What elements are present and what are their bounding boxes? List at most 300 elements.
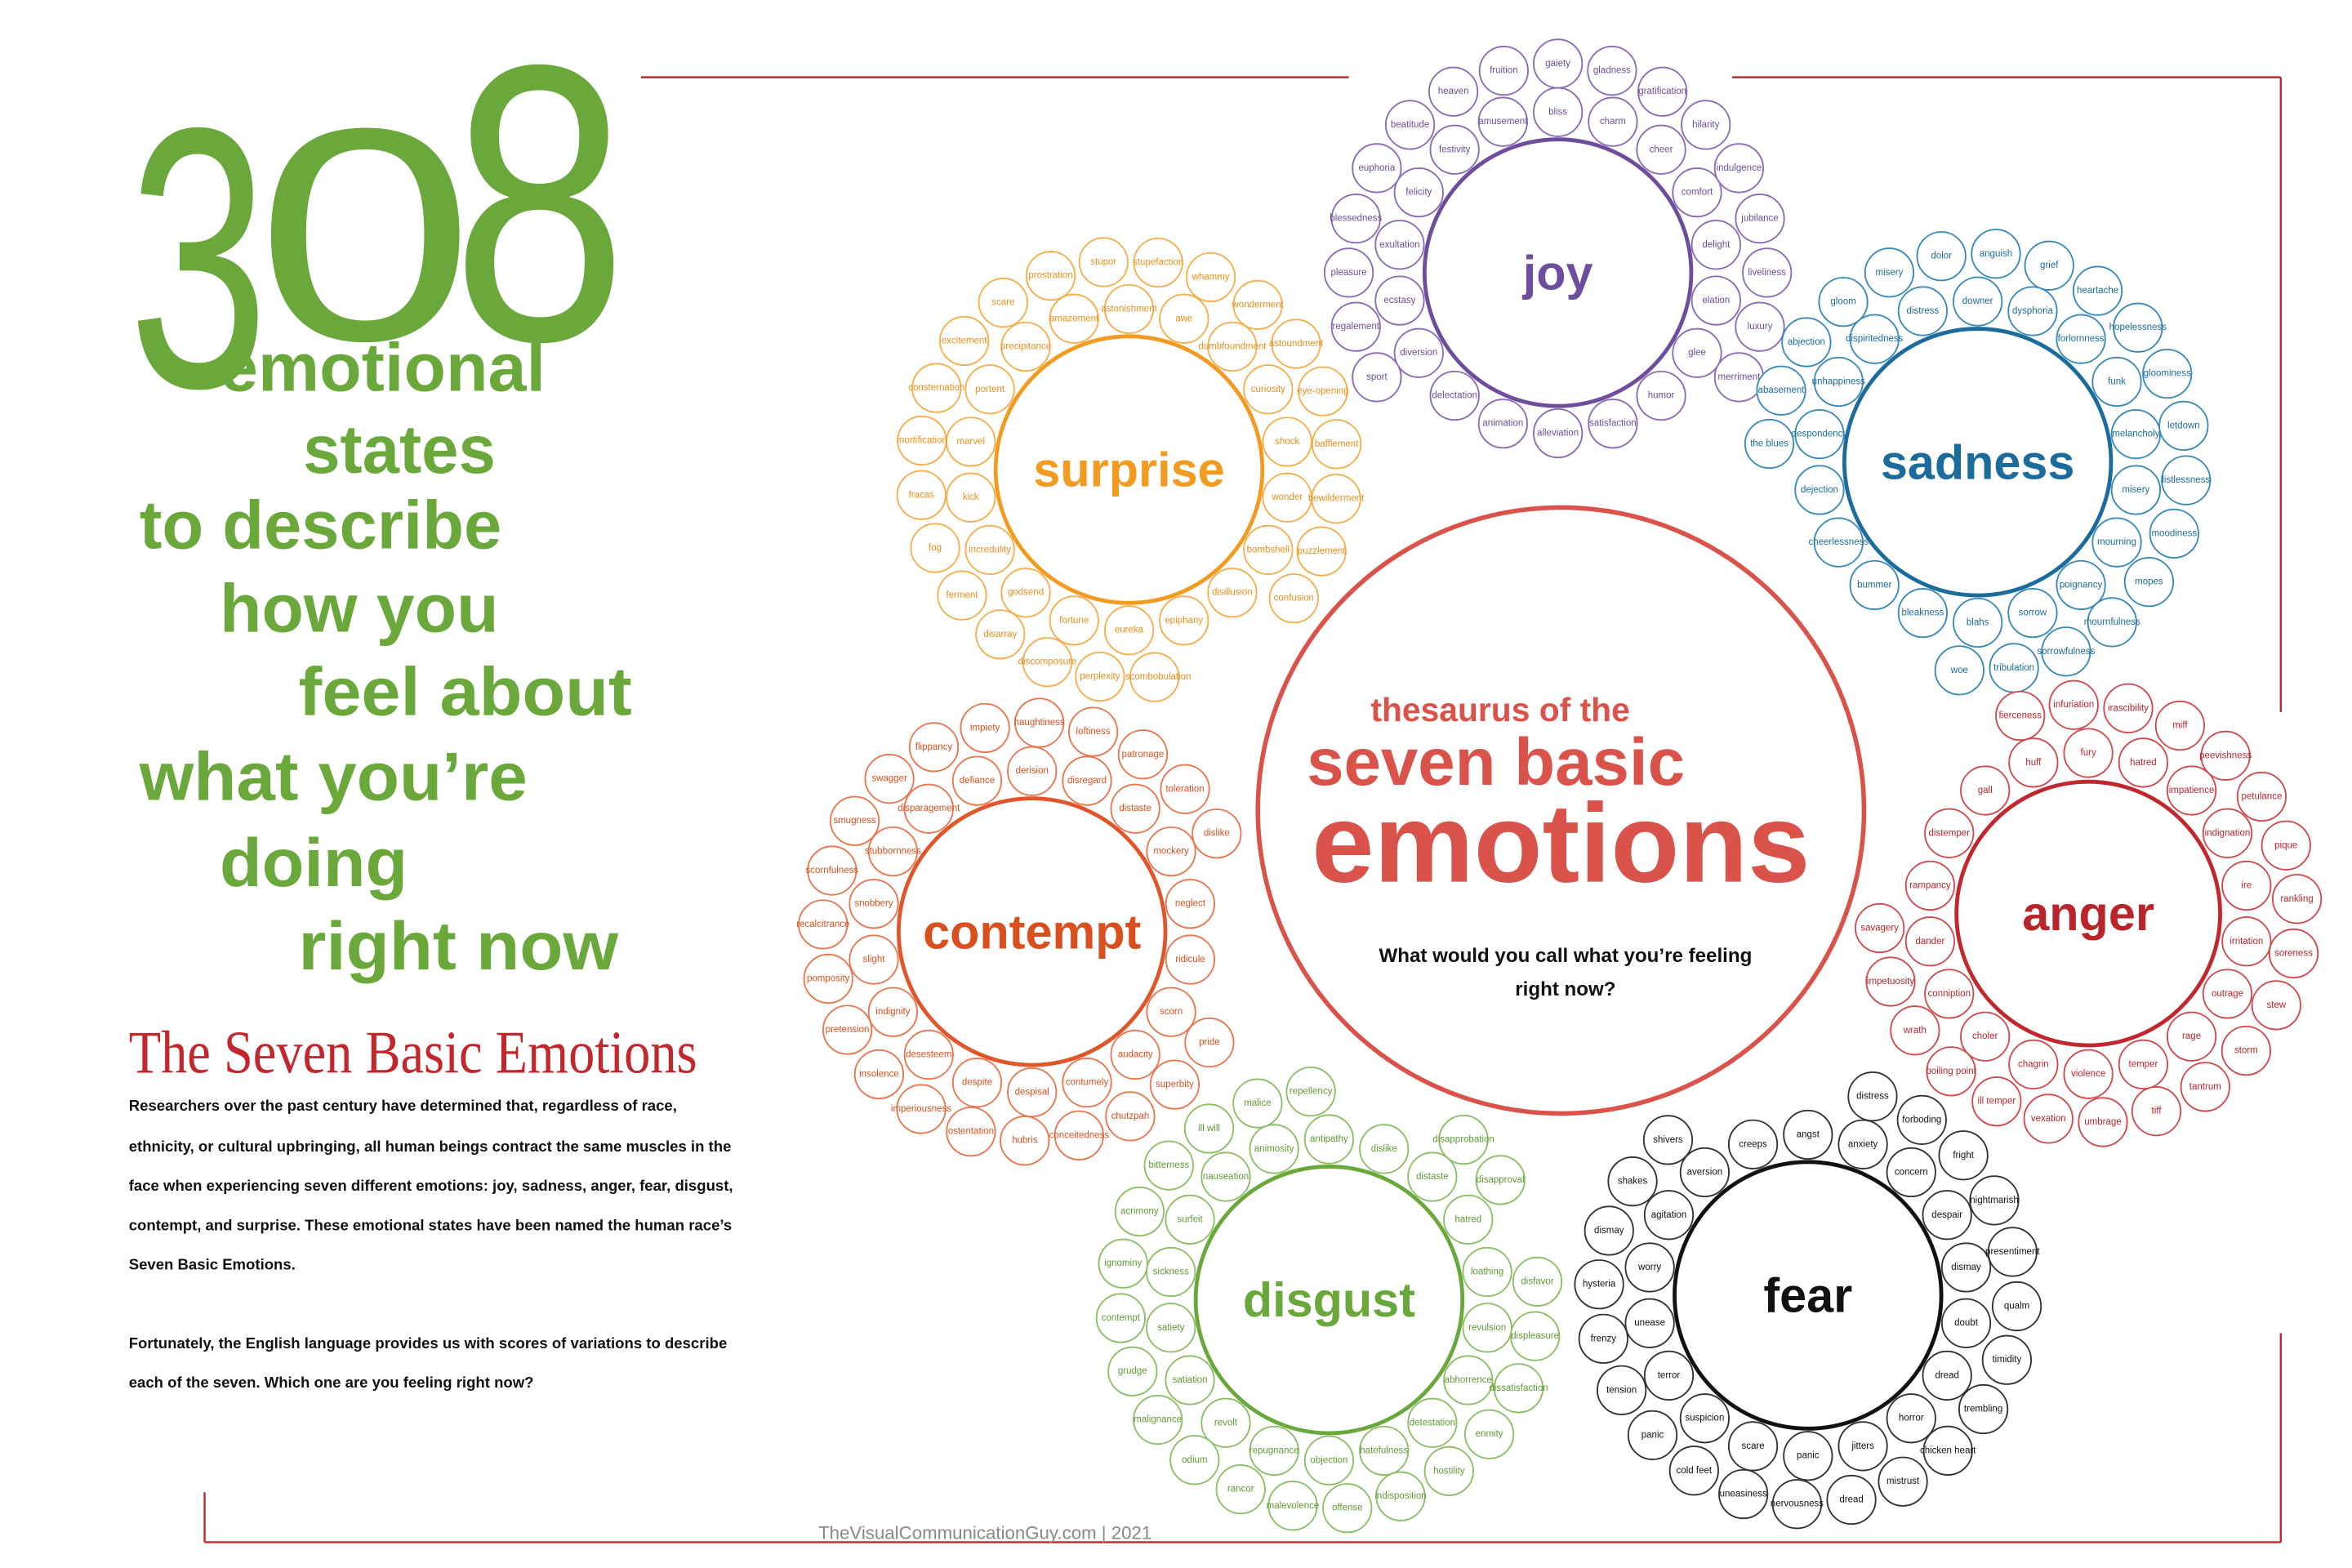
cluster: disgust: surfeit [1177, 1214, 1204, 1224]
cluster: surprise: curiosity [1251, 385, 1285, 394]
cluster: surprise: marvel [957, 437, 985, 447]
cluster: fear: dismay [1594, 1226, 1624, 1236]
cluster: anger: soreness [2274, 948, 2313, 958]
cluster: fear: forboding [1902, 1115, 1941, 1125]
cluster: surprise: amazement [1049, 314, 1099, 323]
cluster: anger: irritation [2230, 937, 2263, 947]
cluster: anger: rampancy [1909, 880, 1951, 890]
cluster: surprise: disarray [983, 630, 1018, 639]
cluster: surprise: godsend [1008, 588, 1044, 598]
cluster: joy: cheer [1650, 145, 1673, 154]
cluster: fear: hysteria [1583, 1280, 1616, 1290]
cluster: sadness: woe [1950, 666, 1968, 675]
cluster: sadness: hopelessness [2109, 323, 2167, 332]
cluster: sadness: anguish [1980, 249, 2012, 259]
cluster: fear: fright [1953, 1151, 1975, 1160]
paragraph text: contempt, and surprise. These emotional states have been named the human race’s [129, 1216, 732, 1233]
cluster: surprise: epiphany [1165, 616, 1203, 626]
cluster: contempt: swagger [871, 774, 907, 784]
cluster: sadness: melancholy [2112, 430, 2160, 439]
cluster: anger [1855, 681, 2321, 1147]
cluster: sadness: bleakness [1901, 608, 1944, 618]
cluster: sadness: gloom [1830, 297, 1856, 307]
cluster: fear: uneasiness [1720, 1490, 1767, 1499]
center circle: thesaurus of the [1370, 691, 1630, 728]
cluster: contempt: toleration [1165, 784, 1205, 794]
cluster: joy: beatitude [1391, 120, 1429, 130]
cluster: contempt: disparagement [898, 804, 960, 813]
cluster: fear [1575, 1072, 2041, 1528]
cluster: contempt: desesteem [906, 1050, 951, 1060]
cluster: sadness: moodiness [2151, 528, 2197, 538]
paragraph text: Fortunately, the English language provides us with scores of variations to describe [129, 1334, 727, 1352]
cluster: sadness: abasement [1758, 385, 1805, 395]
cluster: fear: nervousness [1771, 1499, 1824, 1509]
cluster: anger: anger [2022, 886, 2154, 941]
cluster: fear: dread [1935, 1370, 1959, 1380]
cluster: disgust: satiation [1173, 1375, 1207, 1385]
cluster: surprise: dumbfoundment [1198, 341, 1267, 351]
cluster: disgust: disapprobation [1432, 1135, 1494, 1145]
cluster: anger: wrath [1903, 1026, 1927, 1036]
cluster: contempt: audacity [1118, 1050, 1153, 1060]
cluster: joy: joy [1522, 245, 1593, 300]
cluster: anger: violence [2071, 1069, 2105, 1079]
cluster: contempt: flippancy [915, 742, 952, 752]
footer credit: TheVisualCommunicationGuy.com | 2021 [818, 1523, 1152, 1544]
cluster: fear: dismay [1951, 1263, 1981, 1272]
cluster: fear: shivers [1653, 1135, 1683, 1145]
cluster: sadness: blahs [1967, 617, 1989, 627]
cluster: sadness: distress [1907, 306, 1939, 316]
cluster: disgust: ignominy [1104, 1258, 1142, 1268]
cluster: fear: timidity [1992, 1355, 2022, 1365]
cluster: joy: hilarity [1692, 120, 1720, 130]
cluster: disgust: rancor [1227, 1485, 1254, 1494]
cluster: joy: merriment [1718, 372, 1761, 382]
cluster: sadness: poignancy [2060, 580, 2103, 590]
cluster: disgust: grudge [1118, 1366, 1147, 1376]
cluster: surprise: kick [963, 492, 979, 502]
cluster: surprise: eureka [1115, 626, 1144, 635]
cluster: contempt: smugness [833, 816, 876, 826]
cluster: contempt: dislike [1204, 829, 1230, 839]
cluster: sadness: unhappiness [1812, 376, 1865, 386]
cluster: fear: frenzy [1591, 1334, 1616, 1343]
cluster: joy: euphoria [1358, 163, 1396, 173]
cluster: fear: trembling [1964, 1405, 2002, 1414]
cluster: fear: angst [1797, 1129, 1820, 1139]
center circle: right now? [1515, 978, 1616, 1000]
cluster: fear: tension [1606, 1385, 1637, 1395]
cluster: surprise: awe [1175, 314, 1192, 323]
cluster: sadness: funk [2108, 376, 2126, 386]
cluster: surprise: whammy [1192, 272, 1230, 282]
cluster: disgust: abhorrence [1445, 1375, 1492, 1385]
cluster: sadness: heartache [2077, 286, 2118, 296]
cluster: surprise: portent [975, 385, 1005, 394]
cluster: joy: felicity [1405, 188, 1432, 198]
cluster: sadness: cheerlessness [1809, 537, 1869, 547]
cluster: disgust: disfavor [1521, 1276, 1554, 1286]
cluster: fear: cold feet [1677, 1466, 1713, 1476]
cluster: contempt: impiety [970, 723, 1000, 733]
cluster: surprise: perplexity [1080, 672, 1120, 682]
cluster: sadness: despondency [1792, 430, 1847, 439]
cluster: surprise: scare [991, 298, 1014, 308]
cluster: contempt: ostentation [948, 1127, 994, 1137]
cluster: joy: festivity [1439, 145, 1471, 154]
cluster: anger: umbrage [2084, 1117, 2122, 1127]
cluster: disgust: offense [1332, 1503, 1363, 1513]
cluster: anger: savagery [1860, 923, 1899, 933]
cluster: sadness: downer [1962, 296, 1993, 306]
cluster: anger: pique [2274, 840, 2297, 850]
cluster: joy: jubilance [1740, 214, 1779, 224]
cluster: fear: worry [1637, 1263, 1661, 1272]
cluster: surprise: incredulity [969, 545, 1011, 555]
cluster: anger: storm [2234, 1046, 2258, 1056]
cluster: sadness: dysphoria [2012, 306, 2053, 316]
cluster: joy: alleviation [1537, 429, 1579, 439]
paragraph text: face when experiencing seven different emotions: joy, sadness, anger, fear, disgust, [129, 1177, 733, 1194]
cluster: surprise: fracas [909, 490, 934, 500]
cluster: sadness: dolor [1931, 252, 1952, 261]
cluster: surprise: astoundment [1269, 339, 1324, 349]
cluster: anger: fierceness [1999, 711, 2042, 721]
cluster: surprise: discombobulation [1118, 672, 1191, 682]
cluster: disgust: hatred [1454, 1214, 1481, 1224]
cluster: fear: chicken heart [1920, 1446, 1976, 1455]
cluster: surprise: surprise [1033, 443, 1225, 497]
center circle: seven basic [1307, 725, 1685, 800]
cluster: joy: luxury [1748, 322, 1773, 332]
subtitle lines: what you’re [139, 737, 528, 814]
subtitle lines: to describe [140, 487, 501, 564]
cluster: anger: impetuosity [1867, 977, 1914, 987]
cluster: anger: boiling point [1926, 1067, 1977, 1076]
cluster: anger: choler [1972, 1031, 1998, 1041]
cluster: disgust: revulsion [1468, 1323, 1506, 1333]
cluster: contempt: neglect [1175, 899, 1206, 909]
cluster: fear: scare [1741, 1441, 1765, 1451]
cluster: fear: concern [1895, 1167, 1928, 1177]
center circle [1258, 507, 1864, 1113]
cluster: disgust: malignance [1134, 1414, 1182, 1424]
cluster: fear: qualm [2004, 1301, 2029, 1311]
cluster: sadness: mournfulness [2084, 617, 2140, 627]
cluster: surprise: consternation [908, 383, 964, 393]
center circle: emotions [1312, 782, 1810, 906]
cluster: sadness: dispiritedness [1846, 334, 1904, 344]
cluster: contempt: recalcitrance [796, 920, 849, 929]
cluster: joy: indulgence [1717, 163, 1762, 173]
cluster: anger: huff [2025, 758, 2042, 768]
cluster: disgust: contempt [1102, 1313, 1141, 1323]
cluster: joy: satisfaction [1589, 419, 1637, 429]
heading: The Seven Basic Emotions: The Seven Basic Emotions [129, 1019, 697, 1086]
subtitle lines: emotional [220, 329, 546, 406]
cluster: anger: hatred [2130, 758, 2157, 768]
cluster: anger: chagrin [2018, 1059, 2049, 1069]
cluster: surprise: confusion [1274, 594, 1314, 604]
cluster: sadness: dejection [1801, 485, 1838, 495]
cluster: fear: jitters [1851, 1441, 1874, 1451]
cluster: sadness: the blues [1750, 439, 1788, 448]
cluster: sadness: grief [2040, 261, 2059, 270]
cluster: contempt [796, 698, 1241, 1165]
cluster: anger: rankling [2280, 894, 2314, 904]
cluster: contempt: haughtiness [1014, 718, 1065, 728]
cluster: fear: nightmarish [1970, 1196, 2019, 1205]
cluster: contempt: defiance [960, 776, 995, 786]
cluster: surprise: bafflement [1315, 439, 1359, 449]
cluster: sadness: tribulation [1993, 663, 2034, 673]
cluster: contempt: scornfulness [806, 866, 858, 875]
cluster: contempt: loftiness [1076, 727, 1111, 737]
cluster: contempt: chutzpah [1111, 1111, 1149, 1121]
cluster: surprise: stupefaction [1133, 258, 1183, 268]
cluster: fear: panic [1642, 1430, 1664, 1440]
cluster: disgust: objection [1310, 1455, 1348, 1465]
cluster: fear: doubt [1954, 1318, 1979, 1328]
paragraph text: ethnicity, or cultural upbringing, all human beings contract the same muscles in the [129, 1138, 731, 1155]
cluster: surprise: shock [1275, 437, 1299, 447]
cluster: disgust: bitterness [1148, 1160, 1189, 1170]
cluster: anger: miff [2172, 721, 2188, 731]
cluster: disgust: nauseation [1203, 1172, 1249, 1182]
cluster: disgust: indisposition [1374, 1491, 1427, 1501]
cluster: joy: heaven [1438, 87, 1468, 96]
cluster: surprise: astonishment [1101, 304, 1157, 314]
cluster: fear: suspicion [1685, 1414, 1724, 1423]
title number 308: 3 [128, 51, 269, 466]
title number 308 [128, 0, 627, 466]
subtitle lines: right now [299, 907, 619, 984]
cluster: anger: peevishness [2199, 751, 2252, 760]
cluster: anger: tantrum [2189, 1082, 2221, 1092]
cluster: disgust: dislike [1371, 1144, 1397, 1154]
cluster: disgust: detestation [1410, 1418, 1455, 1428]
cluster: disgust: odium [1182, 1455, 1207, 1465]
cluster: anger: distemper [1929, 828, 1970, 838]
cluster: disgust: hatefulness [1360, 1446, 1408, 1455]
cluster: joy: pleasure [1330, 268, 1367, 278]
cluster: contempt: pride [1199, 1038, 1220, 1048]
cluster: disgust: dissatisfaction [1489, 1383, 1548, 1393]
cluster: disgust: sickness [1153, 1267, 1189, 1277]
cluster: sadness: abjection [1788, 337, 1825, 347]
cluster: anger: rage [2182, 1031, 2201, 1041]
cluster: joy: regalement [1332, 322, 1380, 332]
cluster: anger: stew [2266, 1000, 2287, 1010]
cluster: joy: elation [1702, 296, 1730, 305]
cluster: fear: terror [1658, 1370, 1680, 1380]
cluster: joy: fruition [1490, 66, 1518, 76]
cluster: surprise: wonderment [1231, 300, 1285, 310]
cluster: disgust: repellency [1290, 1087, 1333, 1097]
cluster: disgust: ill will [1198, 1124, 1220, 1134]
cluster: fear: mistrust [1886, 1477, 1920, 1486]
cluster: disgust: satiety [1157, 1323, 1185, 1333]
cluster: joy: bliss [1548, 107, 1567, 117]
cluster: surprise: fog [929, 543, 942, 553]
title number 308: 0 [256, 65, 474, 404]
cluster: joy: amusement [1478, 117, 1528, 127]
cluster: contempt: indignity [875, 1007, 911, 1017]
cluster: joy [1325, 39, 1791, 457]
cluster: joy: delectation [1432, 391, 1477, 401]
cluster: sadness: misery [2122, 485, 2150, 495]
cluster: surprise: discomposure [1018, 657, 1076, 667]
cluster: contempt: contumely [1066, 1078, 1108, 1088]
cluster: fear: panic [1797, 1451, 1820, 1461]
cluster: joy: gladness [1593, 66, 1631, 76]
cluster: sadness: sorrow [2019, 608, 2047, 618]
cluster: sadness: letdown [2167, 421, 2200, 430]
cluster: sadness: mourning [2097, 537, 2136, 547]
cluster: disgust: disgust [1243, 1272, 1415, 1327]
cluster: surprise: puzzlement [1298, 546, 1346, 556]
subtitle lines [139, 329, 632, 984]
cluster: fear: dread [1839, 1494, 1864, 1504]
center circle: What would you call what you’re feeling [1379, 945, 1752, 967]
cluster: surprise: eye-opening [1297, 386, 1349, 396]
cluster: surprise: wonder [1271, 492, 1303, 502]
cluster: fear: distress [1856, 1092, 1889, 1102]
cluster: contempt: imperiousness [891, 1104, 951, 1114]
cluster: contempt: patronage [1122, 750, 1164, 760]
cluster: joy: sport [1366, 372, 1388, 382]
cluster: disgust: malice [1244, 1098, 1271, 1108]
subtitle lines: doing [220, 824, 408, 901]
cluster: fear: unease [1634, 1318, 1665, 1328]
cluster: surprise: bewilderment [1308, 494, 1365, 504]
cluster: sadness: sadness [1881, 434, 2074, 489]
cluster: surprise: prostration [1028, 271, 1073, 281]
cluster: anger: impatience [2169, 786, 2214, 795]
cluster: surprise: fortune [1059, 616, 1089, 626]
cluster: disgust: hostility [1433, 1466, 1465, 1476]
cluster: contempt: pomposity [807, 973, 850, 983]
cluster: contempt: despisal [1015, 1088, 1049, 1098]
cluster: fear: presentiment [1985, 1247, 2040, 1257]
cluster: sadness: misery [1875, 268, 1904, 278]
cluster: contempt: pretension [826, 1025, 869, 1035]
cluster: disgust: distaste [1416, 1172, 1449, 1182]
cluster: contempt: superbity [1156, 1080, 1194, 1089]
cluster: anger: dander [1915, 937, 1944, 947]
cluster: disgust: animosity [1254, 1144, 1294, 1154]
subtitle lines: feel about [299, 653, 632, 730]
cluster: sadness: listlessness [2162, 475, 2210, 485]
cluster: anger: gall [1978, 786, 1993, 795]
cluster: surprise: disillusion [1212, 588, 1253, 598]
cluster: disgust: enmity [1476, 1429, 1503, 1439]
cluster: contempt: conceitedness [1049, 1130, 1109, 1140]
cluster: anger: ill temper [1978, 1097, 2016, 1107]
cluster: contempt: despite [962, 1078, 992, 1088]
cluster: surprise: mortification [897, 435, 947, 445]
cluster: joy: charm [1600, 117, 1626, 127]
cluster: sadness: forlornness [2058, 334, 2105, 344]
cluster: sadness: gloominess [2144, 369, 2191, 379]
cluster: anger: petulance [2241, 791, 2282, 801]
cluster: contempt: stubbornness [865, 847, 921, 857]
cluster: sadness: mopes [2135, 577, 2163, 587]
cluster: surprise: bombshell [1247, 545, 1290, 555]
cluster: contempt: disregard [1067, 776, 1107, 786]
paragraph text: Researchers over the past century have determined that, regardless of race, [129, 1097, 677, 1114]
cluster: joy: ecstasy [1383, 296, 1416, 305]
cluster: disgust: displeasure [1511, 1331, 1559, 1341]
cluster: contempt: distaste [1119, 804, 1152, 813]
cluster: contempt: mockery [1153, 847, 1189, 857]
cluster: joy: comfort [1682, 188, 1713, 198]
cluster: sadness: sorrowfulness [2037, 647, 2096, 657]
cluster: fear: anxiety [1848, 1139, 1878, 1149]
cluster: anger: fury [2081, 748, 2096, 758]
subtitle lines: states [303, 411, 496, 488]
cluster: disgust: loathing [1471, 1267, 1503, 1277]
cluster: sadness: bummer [1857, 580, 1891, 590]
cluster: disgust: revolt [1214, 1418, 1238, 1428]
cluster: anger: tiff [2152, 1107, 2162, 1116]
cluster: joy: diversion [1400, 348, 1437, 358]
cluster: anger: infuriation [2053, 700, 2094, 710]
cluster: surprise: excitement [942, 336, 987, 345]
cluster: contempt: insolence [859, 1069, 899, 1079]
cluster: surprise [897, 238, 1365, 702]
cluster: fear: agitation [1651, 1210, 1686, 1220]
cluster: joy: liveliness [1748, 268, 1786, 278]
cluster: joy: exultation [1379, 240, 1420, 250]
cluster: contempt: scorn [1160, 1007, 1183, 1017]
cluster: disgust: acrimony [1120, 1206, 1159, 1216]
cluster: anger: outrage [2212, 989, 2243, 999]
cluster: contempt: ridicule [1175, 955, 1205, 964]
cluster: contempt: derision [1016, 766, 1049, 776]
cluster: fear: horror [1899, 1414, 1924, 1423]
cluster: joy: gratification [1638, 87, 1686, 96]
cluster: contempt: snobbery [854, 899, 893, 909]
cluster: disgust: repugnance [1250, 1446, 1299, 1455]
cluster: anger: irascibility [2108, 703, 2149, 713]
cluster: anger: vexation [2031, 1114, 2066, 1124]
cluster: contempt: hubris [1012, 1136, 1038, 1146]
cluster: anger: conniption [1928, 989, 1971, 999]
cluster: joy: delight [1702, 240, 1731, 250]
cluster: anger: ire [2241, 880, 2252, 890]
paragraph text [129, 1097, 733, 1391]
cluster: anger: temper [2128, 1059, 2158, 1069]
cluster: fear: despair [1931, 1210, 1962, 1220]
cluster: joy: gaiety [1545, 59, 1570, 69]
cluster: joy: glee [1688, 348, 1706, 358]
cluster: joy: blessedness [1330, 214, 1382, 224]
cluster: fear: fear [1763, 1268, 1852, 1323]
cluster: disgust: disapproval [1477, 1175, 1525, 1185]
cluster: surprise: ferment [946, 590, 978, 600]
cluster: joy: humor [1648, 391, 1675, 401]
paragraph text: each of the seven. Which one are you feeling right now? [129, 1374, 533, 1391]
cluster: disgust: antipathy [1310, 1134, 1348, 1144]
cluster: surprise: stupor [1090, 257, 1116, 267]
cluster: disgust [1097, 1067, 1561, 1532]
cluster: anger: indignation [2205, 828, 2250, 838]
cluster: fear: shakes [1618, 1177, 1648, 1187]
cluster: disgust: malevolence [1267, 1501, 1319, 1511]
